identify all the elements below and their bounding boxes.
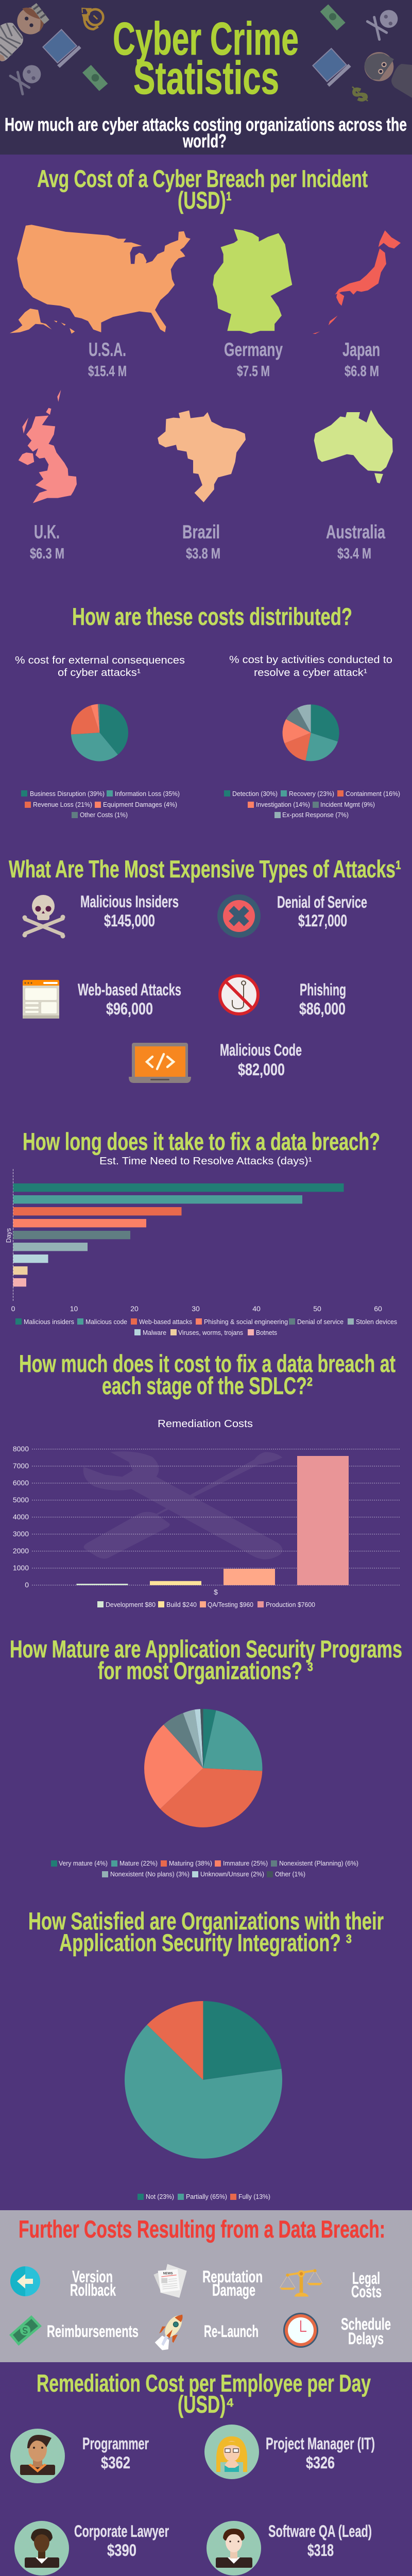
legend: remediation stages: Build $240 — [166, 1601, 197, 1608]
label: malicious insiders: Malicious Insiders — [80, 892, 179, 911]
bar chart: days to resolve: Days — [5, 1228, 12, 1243]
legend: attack types: Stolen devices — [356, 1318, 397, 1326]
chart title: resolve activities: resolve a cyber attack¹ — [254, 667, 367, 679]
label: web-based attacks — [78, 980, 181, 1018]
legend: attack types: Malware — [143, 1329, 166, 1336]
label: phishing — [299, 980, 346, 1018]
bar chart: remediation costs: 6000 — [13, 1479, 29, 1487]
label: reputation damage: Reputation — [202, 2267, 263, 2286]
label: Australia — [326, 521, 385, 562]
heading: maturity: for most Organizations? ³ — [98, 1657, 313, 1684]
legend: external consequences: Equipment Damages (4%) — [103, 801, 177, 808]
label: denial of service: $127,000 — [298, 911, 347, 930]
label: malicious code: Malicious Code — [220, 1041, 302, 1059]
legend: attack types — [15, 1318, 397, 1336]
map: UK — [19, 390, 77, 503]
label: Brazil: $3.8 M — [186, 546, 220, 562]
legend: program maturity: Nonexistent (No plans) (3%) — [110, 1871, 190, 1878]
label: malicious insiders — [80, 892, 179, 930]
subtitle: world? — [182, 130, 227, 151]
label: USA: $15.4 M — [88, 363, 127, 380]
header banner — [0, 0, 412, 155]
label: UK: $6.3 M — [30, 546, 64, 562]
label: phishing: Phishing — [300, 980, 346, 999]
title: Cyber Crime — [113, 13, 299, 65]
icon: banknote right — [320, 4, 346, 30]
label: Australia: $3.4 M — [337, 546, 371, 562]
label: legal costs: Legal — [352, 2269, 380, 2287]
label: UK — [30, 521, 64, 562]
label: web-based attacks: Web-based Attacks — [78, 980, 181, 999]
pie chart: satisfaction — [125, 2001, 282, 2159]
label: programmer: Programmer — [82, 2434, 149, 2453]
icon: laptop right — [313, 48, 351, 87]
icon: laptop left — [43, 29, 81, 68]
label: Japan: Japan — [342, 339, 380, 360]
bar chart: remediation costs: 1000 — [13, 1564, 29, 1572]
label: Brazil: Brazil — [182, 521, 220, 543]
label: USA: U.S.A. — [89, 339, 126, 360]
legend: program maturity: Other (1%) — [275, 1871, 305, 1878]
icon: scales — [280, 2269, 322, 2297]
icon: clock — [283, 2313, 318, 2348]
icon: money — [9, 2315, 42, 2346]
legend: attack types: Phishing & social engineering — [204, 1318, 288, 1326]
icon: rocket — [155, 2313, 185, 2350]
icon: prisoner — [0, 3, 49, 61]
legend: external consequences: Revenue Loss (21%) — [33, 801, 92, 808]
icon: skull right — [367, 10, 398, 40]
chart title: external consequences: % cost for external consequences — [15, 655, 185, 666]
bar chart: days to resolve: 10 — [70, 1304, 78, 1313]
bar chart: remediation costs: 2000 — [13, 1547, 29, 1555]
bar chart: remediation costs: 0 — [25, 1581, 29, 1589]
pie chart: program maturity — [144, 1709, 262, 1827]
label: Australia: Australia — [326, 521, 385, 543]
avatar: project manager — [204, 2425, 259, 2479]
avatar: corporate lawyer — [14, 2521, 69, 2575]
icon: back arrow — [10, 2266, 40, 2296]
label: Brazil — [182, 521, 220, 562]
pie chart: external consequences — [71, 704, 128, 761]
label: malicious code — [220, 1041, 302, 1079]
legend: external consequences: Business Disruption (39%) — [30, 790, 105, 798]
icon: no phishing — [220, 976, 258, 1014]
title — [113, 13, 299, 104]
icon: wrench and screwdriver watermark — [83, 1451, 282, 1560]
legend: program maturity: Unknown/Unsure (2%) — [200, 1871, 264, 1878]
icon: banknote left — [82, 65, 108, 91]
icon: denial of service — [217, 894, 261, 938]
map: Germany — [213, 229, 292, 334]
icon: handcuffs — [82, 8, 103, 29]
label: phishing: $86,000 — [299, 999, 346, 1018]
label: software QA lead — [268, 2522, 372, 2560]
legend: program maturity: Very mature (4%) — [59, 1860, 108, 1867]
chart title: resolve activities: % cost by activities conducted to — [229, 654, 392, 666]
heading: maturity — [10, 1635, 402, 1684]
legend: external consequences: Other Costs (1%) — [80, 811, 128, 819]
label: programmer: $362 — [101, 2453, 130, 2472]
icon: robber — [365, 52, 412, 98]
label: project manager — [266, 2434, 375, 2472]
legend: satisfaction — [138, 2193, 270, 2200]
legend: resolve activities: Incident Mgmt (9%) — [320, 801, 375, 808]
label: version rollback: Rollback — [70, 2281, 116, 2299]
icon: newspaper — [153, 2264, 187, 2298]
label: schedule delays — [341, 2315, 391, 2348]
label: reputation damage: Damage — [212, 2281, 255, 2299]
label: web-based attacks: $96,000 — [106, 999, 153, 1018]
label: software QA lead: $318 — [307, 2541, 334, 2560]
legend: attack types: Botnets — [256, 1329, 277, 1336]
legend: program maturity — [51, 1860, 358, 1878]
label: version rollback — [70, 2267, 116, 2299]
label: corporate lawyer: $390 — [107, 2541, 136, 2560]
map: Brazil — [158, 411, 246, 502]
pie chart: resolve activities — [283, 704, 339, 761]
icon: dollar sign — [352, 87, 368, 101]
label: Germany: $7.5 M — [237, 363, 270, 380]
label: USA — [88, 339, 127, 380]
label: legal costs: Costs — [351, 2282, 382, 2301]
legend: satisfaction: Not (23%) — [146, 2193, 174, 2200]
legend: attack types: Viruses, worms, trojans — [178, 1329, 243, 1336]
bar chart: remediation costs — [13, 1445, 400, 1596]
chart title: resolve time: Est. Time Need to Resolve Attacks (days)¹ — [99, 1156, 312, 1167]
bar chart: days to resolve — [5, 1169, 382, 1313]
legend: attack types: Malicious code — [85, 1318, 127, 1326]
legend: resolve activities: Recovery (23%) — [289, 790, 334, 798]
avatar: software QA lead — [207, 2521, 261, 2575]
map: USA — [10, 225, 191, 334]
heading: average cost — [37, 165, 368, 214]
legend: attack types: Web-based attacks — [139, 1318, 192, 1326]
bar chart: remediation costs: 8000 — [13, 1445, 29, 1453]
label: UK: U.K. — [34, 521, 60, 543]
bar chart: days to resolve: 20 — [130, 1304, 139, 1313]
heading: remediation per employee: (USD)⁴ — [178, 2391, 234, 2418]
legend: resolve activities: Investigation (14%) — [256, 801, 310, 808]
panel: further costs — [0, 2210, 412, 2362]
label: denial of service: Denial of Service — [277, 893, 367, 911]
label: Germany — [224, 339, 283, 380]
chart title: remediation costs: Remediation Costs — [158, 1418, 253, 1430]
legend: remediation stages: Development $80 — [106, 1601, 156, 1608]
label: malicious code: $82,000 — [238, 1060, 285, 1079]
label: corporate lawyer: Corporate Lawyer — [74, 2522, 169, 2540]
legend: program maturity: Nonexistent (Planning) (6%) — [279, 1860, 358, 1867]
bar chart: days to resolve: 40 — [252, 1304, 261, 1313]
heading: average cost: (USD)¹ — [178, 187, 232, 214]
legend: resolve activities: Ex-post Response (7%) — [282, 811, 349, 819]
legend: resolve activities: Detection (30%) — [232, 790, 278, 798]
legend: program maturity: Maturing (38%) — [169, 1860, 212, 1867]
label: schedule delays: Delays — [348, 2329, 384, 2348]
label: Japan: $6.8 M — [345, 363, 379, 380]
subtitle — [5, 114, 407, 151]
icon: browser window — [23, 980, 59, 1019]
heading: SDLC cost — [19, 1350, 396, 1399]
legend: program maturity: Immature (25%) — [223, 1860, 268, 1867]
legend: attack types: Malicious insiders — [24, 1318, 74, 1326]
chart title: external consequences: of cyber attacks¹ — [58, 667, 141, 679]
chart title: external consequences — [15, 655, 185, 679]
legend: remediation stages: Production $7600 — [266, 1601, 315, 1608]
map: Australia — [314, 410, 393, 483]
heading: remediation per employee — [37, 2369, 371, 2418]
label: schedule delays: Schedule — [341, 2315, 391, 2333]
label: reimbursements: Reimbursements — [47, 2322, 139, 2341]
label: corporate lawyer — [74, 2522, 169, 2560]
bar chart: remediation costs: 5000 — [13, 1496, 29, 1504]
bar chart: remediation costs: 3000 — [13, 1530, 29, 1538]
label: Japan — [342, 339, 380, 380]
label: malicious insiders: $145,000 — [104, 911, 155, 930]
legend: remediation stages — [97, 1601, 315, 1608]
bar chart: remediation costs: 4000 — [13, 1513, 29, 1521]
legend: external consequences: Information Loss (35%) — [115, 790, 180, 798]
icon: skull and crossbones — [23, 895, 65, 939]
label: Germany: Germany — [224, 339, 283, 360]
bar chart: days to resolve: 30 — [192, 1304, 200, 1313]
label: reputation damage — [202, 2267, 263, 2299]
chart title: resolve activities — [229, 654, 392, 679]
label: legal costs — [351, 2269, 382, 2301]
heading: satisfaction — [28, 1907, 384, 1956]
legend: program maturity: Mature (22%) — [119, 1860, 158, 1867]
legend: satisfaction: Partially (65%) — [186, 2193, 227, 2200]
bar chart: days to resolve: 0 — [11, 1304, 15, 1313]
bar chart: days to resolve: 50 — [313, 1304, 321, 1313]
label: re-launch: Re-Launch — [204, 2322, 259, 2341]
bar chart: days to resolve: 60 — [374, 1304, 382, 1313]
legend: external consequences — [21, 790, 180, 819]
legend: satisfaction: Fully (13%) — [238, 2193, 270, 2200]
bar chart: remediation costs: 7000 — [13, 1462, 29, 1470]
label: denial of service — [277, 893, 367, 930]
label: project manager: $326 — [306, 2453, 335, 2472]
legend: remediation stages: QA/Testing $960 — [208, 1601, 253, 1608]
heading: SDLC cost: each stage of the SDLC?² — [102, 1372, 313, 1399]
label: programmer — [82, 2434, 149, 2472]
map: Japan — [313, 230, 401, 334]
label: version rollback: Version — [72, 2267, 113, 2286]
legend: resolve activities: Containment (16%) — [346, 790, 400, 798]
icon: laptop with code — [129, 1043, 191, 1083]
legend: resolve activities — [224, 790, 400, 819]
icon: newspaper: NEWS — [163, 2272, 173, 2275]
bar chart: remediation costs: $ — [214, 1588, 218, 1596]
avatar: programmer — [10, 2429, 65, 2483]
title: Statistics — [133, 53, 279, 104]
icon: skull left — [10, 65, 41, 94]
legend: attack types: Denial of service — [297, 1318, 344, 1326]
